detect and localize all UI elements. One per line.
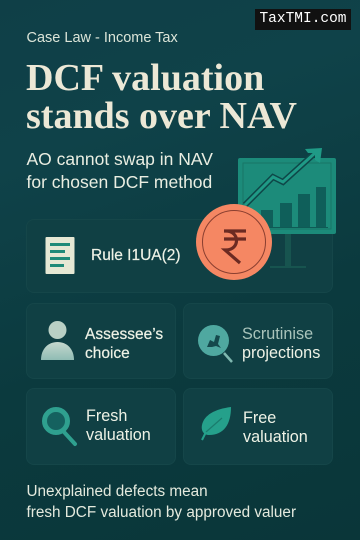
logo: TaxTMI.com [255,9,351,30]
label: Free [243,409,276,427]
bars [261,187,326,227]
label: Assessee’s [85,326,163,343]
panel: Scrutinise projections [183,303,333,379]
subtitle [26,149,213,192]
icon: rupee coin [196,204,272,280]
chart: presentation board [238,148,336,268]
icon: magnifier [198,325,233,363]
label: Fresh [86,407,127,425]
label: valuation [86,426,151,444]
arrow [245,153,315,205]
footer text [26,483,296,521]
panel: Rule 11UA(2) [26,219,333,293]
label [243,409,308,446]
board [238,158,336,234]
icon: leaf [201,407,231,440]
logo: TaxTMI.com: TaxTMI.com [259,11,346,27]
label: choice [85,345,130,362]
label: projections [242,344,320,362]
panel: Assessee's choice [26,303,176,379]
label [86,407,151,444]
label: Scrutinise [242,325,313,343]
footer text: fresh DCF valuation by approved valuer [26,504,296,521]
panel: Free valuation [183,388,333,465]
icon: document [46,237,74,274]
title: DCF valuation [26,56,264,98]
label: Rule 11UA(2): Rule I1UA(2) [91,247,181,264]
footer text: Unexplained defects mean [26,483,208,500]
subtitle: AO cannot swap in NAV [26,149,213,169]
icon: person [41,321,74,360]
label: valuation [243,428,308,446]
heading: category: Case Law - Income Tax [26,30,178,46]
subtitle: for chosen DCF method [26,172,212,192]
title: stands over NAV [26,94,297,136]
icon: magnifier [42,407,78,446]
label [242,325,320,362]
panel: Fresh valuation [26,388,176,465]
title [26,56,297,136]
label [84,326,163,362]
stand [285,234,291,266]
